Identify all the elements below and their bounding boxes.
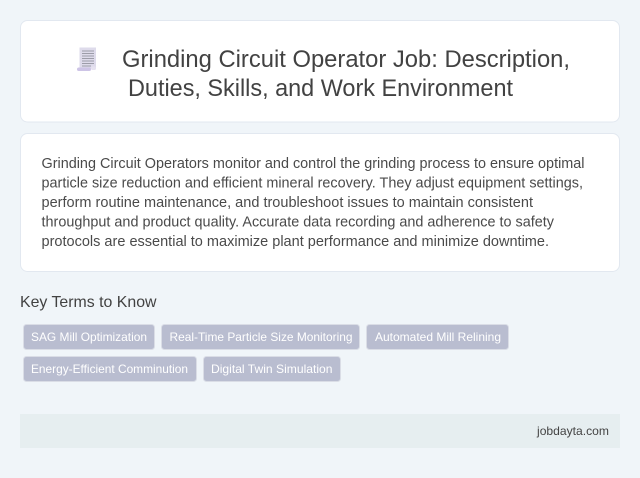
footer source: jobdayta.com	[536, 424, 609, 438]
title: Grinding Circuit Operator Job: Description,	[122, 46, 570, 73]
tag: Digital Twin Simulation: Digital Twin Simulation	[211, 362, 332, 376]
tag: Automated Mill Relining	[366, 324, 508, 350]
icon: document scroll	[77, 48, 96, 71]
description text: perform routine maintenance, and troubleshoot issues to maintain consistent	[42, 195, 533, 211]
tag: Automated Mill Relining: Automated Mill Relining	[375, 330, 501, 344]
panel: title card	[20, 20, 620, 122]
description text: particle size reduction and efficient mineral recovery. They adjust equipment settings,	[42, 176, 583, 192]
tag: Digital Twin Simulation	[204, 356, 340, 382]
tag: SAG Mill Optimization: SAG Mill Optimization	[31, 330, 147, 344]
title: Duties, Skills, and Work Environment	[128, 75, 513, 102]
tag: Real-Time Particle Size Monitoring: Real-Time Particle Size Monitoring	[170, 330, 352, 344]
tag: Real-Time Particle Size Monitoring	[162, 324, 360, 350]
tag: Energy-Efficient Comminution	[24, 356, 196, 382]
description text: protocols are essential to maximize plant performance and minimize downtime.	[42, 234, 549, 250]
description text: Grinding Circuit Operators monitor and control the grinding process to ensure optimal	[42, 156, 584, 172]
tag: Energy-Efficient Comminution: Energy-Efficient Comminution	[31, 362, 188, 376]
title	[122, 46, 570, 102]
panel: description card	[20, 134, 620, 272]
description text	[42, 156, 584, 250]
heading: key terms: Key Terms to Know	[20, 294, 157, 311]
footer bar	[20, 414, 620, 448]
description text: throughput and product quality. Accurate data recording and adherence to safety	[42, 214, 555, 230]
tag: SAG Mill Optimization	[24, 324, 154, 350]
